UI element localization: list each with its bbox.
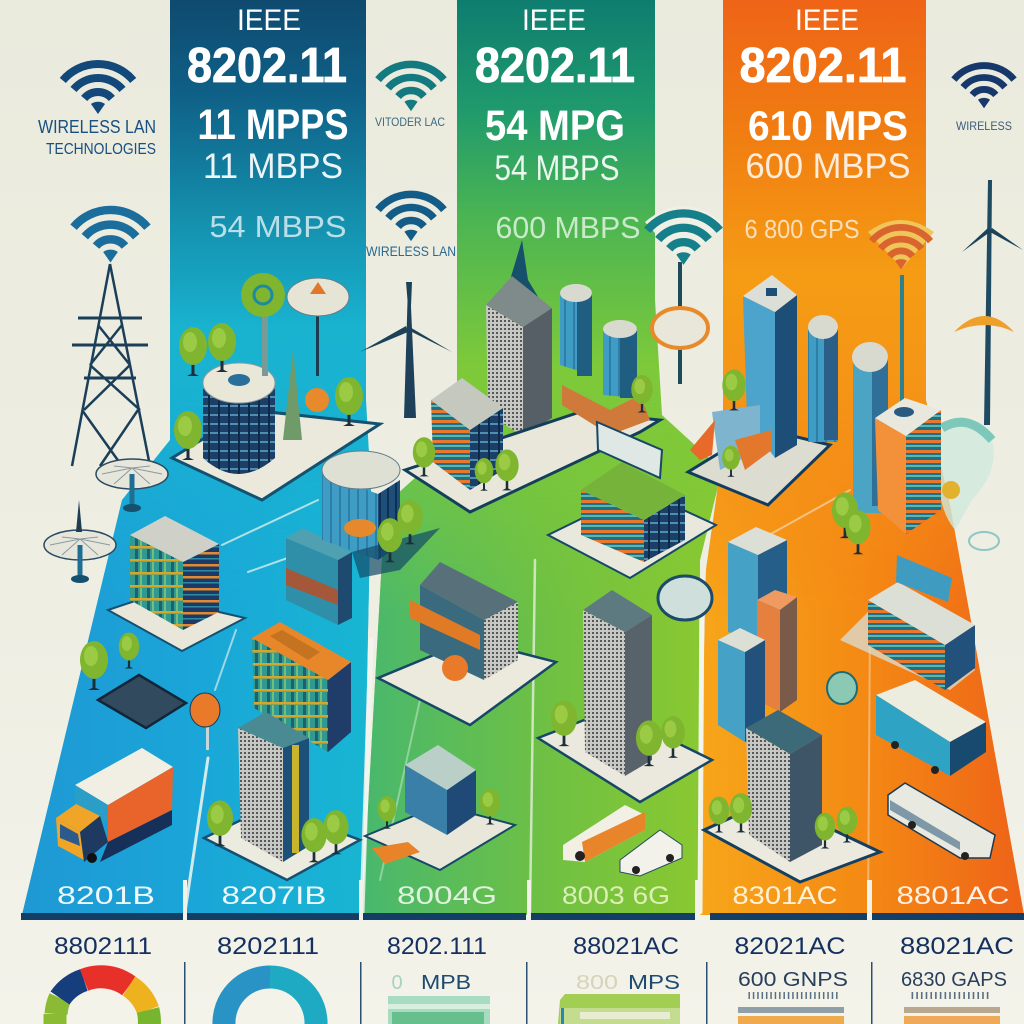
scene: orange band small block and trees xyxy=(690,370,772,477)
scene: orange band tall tower xyxy=(688,275,830,505)
icon: wifi, left second xyxy=(74,210,147,262)
icon: round tree on pole xyxy=(241,273,285,376)
label: 11 Mbps light: 11 MBPS xyxy=(203,147,343,186)
platform xyxy=(108,596,245,651)
road lines xyxy=(185,490,870,912)
label: 54 Mbps faint: 54 MBPS xyxy=(210,209,346,244)
caption: right top: WIRELESS xyxy=(956,119,1012,133)
heading 3: 8202.111 xyxy=(387,933,487,960)
tab: column 5: 8301AC xyxy=(732,882,838,910)
right face xyxy=(283,738,309,862)
icon: wifi, left top xyxy=(63,64,133,114)
bar chart xyxy=(738,1007,844,1024)
sign: green band xyxy=(597,422,662,478)
label: IEEE: IEEE xyxy=(522,4,586,37)
icon: white van xyxy=(620,830,682,876)
bottom column tabs xyxy=(57,882,1010,910)
label: standard number: 8202.11 xyxy=(475,39,635,93)
icon: orange van xyxy=(563,805,645,862)
heading 1: 8802111 xyxy=(54,933,152,960)
left face xyxy=(238,728,283,862)
scene: green band slim towers xyxy=(560,284,637,398)
icon: transmission pylon xyxy=(72,264,150,466)
scene: green band low colourful block xyxy=(413,375,653,491)
label: 54 Mbps bold: 54 MPG xyxy=(485,102,625,150)
roof xyxy=(130,516,219,562)
bar chart xyxy=(558,994,680,1024)
icon: wifi, gap top xyxy=(378,64,444,111)
scene: green roof building xyxy=(548,462,716,578)
chart: multicolour donut xyxy=(55,977,149,1024)
label: 54 Mbps light: 54 MBPS xyxy=(494,149,620,188)
icon: tablet xyxy=(98,675,186,728)
panel: 802.11g green band xyxy=(362,0,722,915)
faded digits: 800 xyxy=(576,972,618,994)
small caption: IIIIIIIIIIIIIIIII xyxy=(910,991,990,1002)
scene: green band grey tower xyxy=(538,590,712,802)
caption: gap top: VITODER LAC xyxy=(375,115,445,129)
label: 610 Mbps bold: 610 MPS xyxy=(748,102,908,149)
icon: wind turbine right xyxy=(954,180,1023,425)
speed label: MPS xyxy=(628,972,680,994)
trees: green band grey tower xyxy=(551,700,685,766)
icon: orange pin xyxy=(190,693,220,750)
trees: orange grey tower xyxy=(709,793,857,849)
icon: parasol dish xyxy=(287,278,349,376)
speed block: column 6 xyxy=(901,969,1007,1024)
heading 6: 88021AC xyxy=(900,933,1014,960)
trees: blue top xyxy=(174,323,363,460)
tab: column 1: 8201B xyxy=(57,882,155,910)
chart: blue donut xyxy=(224,977,316,1024)
scene: green band small building xyxy=(365,745,515,870)
platform xyxy=(172,410,380,500)
tab: column 3: 8004G xyxy=(397,882,497,910)
label: 600 Mbps faint: 600 MBPS xyxy=(496,210,640,245)
panel: 802.11ac orange band xyxy=(698,0,1024,915)
scene: orange band slim tower xyxy=(808,315,838,442)
caption: wireless LAN technologies: WIRELESS LAN xyxy=(38,117,156,137)
label: standard number: 8202.11 xyxy=(740,39,906,93)
scene: orange band back tower xyxy=(852,342,888,513)
scene: orange facade tower xyxy=(875,398,941,534)
label: standard number: 8202.11 xyxy=(187,39,347,93)
roof logo xyxy=(228,374,250,386)
caption: gap second: WIRELESS LAN xyxy=(366,243,456,259)
white separators between tabs xyxy=(183,880,872,920)
panel: 802.11b blue band xyxy=(22,0,371,915)
right face xyxy=(183,544,219,630)
label: 6800 Gbps faint: 6 800 GPS xyxy=(744,214,860,244)
icon: faint eye mark xyxy=(969,532,999,550)
icon: white coach xyxy=(888,783,995,860)
icon: wifi, gap second xyxy=(378,194,444,241)
scene: orange roof building xyxy=(252,622,351,752)
icon: cargo truck xyxy=(876,680,986,776)
speed label: MPB xyxy=(421,972,471,994)
tab: column 6: 8801AC xyxy=(896,882,1010,910)
column headings xyxy=(54,933,1014,960)
scene: teal-green building xyxy=(108,516,245,651)
scene: orange band tower cluster xyxy=(718,527,797,742)
trees: grey tower xyxy=(207,800,349,862)
caption: wireless LAN technologies xyxy=(38,117,156,158)
scene: blue top building xyxy=(172,363,380,500)
trees and platform: parasol building xyxy=(352,500,440,578)
label: IEEE: IEEE xyxy=(795,4,859,37)
trees: small building xyxy=(378,789,500,829)
tab: column 4: 8003 6G xyxy=(562,882,670,910)
trees: orange middle xyxy=(832,492,871,554)
label: IEEE: IEEE xyxy=(237,4,301,37)
heading: blue band speeds xyxy=(187,4,348,244)
scene: shop building xyxy=(378,562,556,725)
heading: green band speeds xyxy=(475,4,640,245)
icon: wifi with mast over green edge xyxy=(645,206,722,384)
icon: delivery truck xyxy=(56,748,173,863)
tab: column 2: 8207IB xyxy=(222,882,326,910)
scene: green band top platform xyxy=(405,412,660,512)
left face xyxy=(130,535,183,630)
column separators xyxy=(184,962,872,1024)
scene: dark teal billboard building xyxy=(286,528,352,625)
scene: grey tower blue band xyxy=(204,712,360,880)
speed block: column 3 xyxy=(388,972,490,1024)
trees: lower left xyxy=(80,633,139,690)
scene: orange band glass block xyxy=(840,555,975,690)
platform xyxy=(204,806,360,880)
scene: parasol building xyxy=(322,451,400,560)
roof xyxy=(203,363,275,403)
heading 4: 88021AC xyxy=(573,933,679,960)
bar chart xyxy=(904,1007,1000,1024)
speed label: 6830 GAPS xyxy=(901,969,1007,991)
caption: wireless LAN technologies: TECHNOLOGIES xyxy=(46,141,156,158)
icon: wifi rings by orange tower xyxy=(938,422,994,530)
label: 11 Mbps bold: 11 MPPS xyxy=(198,101,348,149)
scene: green band mid building xyxy=(431,378,503,490)
label: 600 Mbps light: 600 MBPS xyxy=(746,147,910,186)
icon: green pin xyxy=(827,672,857,704)
speed block: column 5 xyxy=(738,969,848,1024)
tab underline strips xyxy=(21,913,1024,920)
icon: mast on dish xyxy=(76,500,82,532)
heading 2: 8202111 xyxy=(217,933,319,960)
icon: round sign green band xyxy=(658,576,712,620)
faded digit: 0 xyxy=(391,972,403,994)
heading 5: 82021AC xyxy=(734,933,846,960)
bar chart xyxy=(388,996,490,1024)
speed label: 600 GNPS xyxy=(738,969,848,991)
icon: small spire and orange sign xyxy=(283,350,329,440)
icon: wind turbine centre xyxy=(360,282,452,418)
icon: dish near pylon xyxy=(96,459,168,512)
speed block: column 4 xyxy=(558,972,680,1024)
scene: green band tall tower xyxy=(486,240,552,436)
scene: orange band grey tower xyxy=(704,710,880,882)
round building xyxy=(203,385,275,474)
roof xyxy=(238,712,309,748)
heading: orange band speeds xyxy=(740,4,910,244)
small caption: IIIIIIIIIIIIIIIIIIIII xyxy=(747,991,839,1002)
icon: dish lower left xyxy=(44,530,116,583)
icon: antenna pole with wifi xyxy=(868,220,934,405)
icon: wifi, right top xyxy=(954,66,1014,108)
